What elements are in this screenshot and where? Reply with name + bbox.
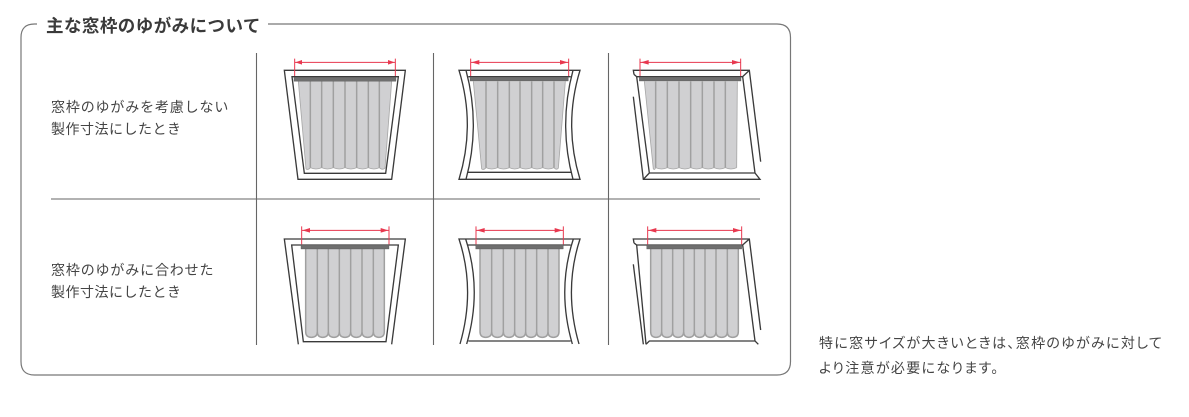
window: hourglass, size not considering distortion <box>459 59 580 179</box>
curtain <box>298 81 392 169</box>
head rail <box>647 245 742 249</box>
window frame <box>284 70 405 179</box>
row label: size matching distortion: 製作寸法にしたとき <box>51 284 182 300</box>
red width dimension arrow <box>648 226 742 244</box>
window: parallelogram, size matching distortion <box>633 226 761 344</box>
head rail <box>476 245 563 249</box>
side note <box>819 335 1163 376</box>
window frame <box>284 239 405 344</box>
head rail <box>470 77 568 81</box>
panel outline <box>21 24 790 375</box>
window frame <box>459 70 580 179</box>
curtain <box>473 81 565 169</box>
row label: size not considering distortion <box>51 99 229 137</box>
curtain <box>644 81 737 169</box>
window: parallelogram, size not considering distortion <box>633 59 761 179</box>
red width dimension arrow <box>471 59 569 76</box>
head rail <box>294 77 396 81</box>
side note: 特に窓サイズが大きいときは、窓枠のゆがみに対して <box>819 335 1163 351</box>
head rail <box>301 245 389 249</box>
red width dimension arrow <box>295 59 395 76</box>
head rail <box>639 77 741 81</box>
window frame <box>633 70 761 179</box>
row label: size matching distortion: 窓枠のゆがみに合わせた <box>51 262 214 278</box>
curtain <box>651 249 738 337</box>
window: trapezoid, size matching distortion <box>284 226 405 344</box>
red width dimension arrow <box>302 226 389 244</box>
curtain <box>480 249 559 337</box>
side note: より注意が必要になります。 <box>819 360 1000 376</box>
red width dimension arrow <box>476 226 563 244</box>
row label: size matching distortion <box>51 262 214 300</box>
red width dimension arrow <box>640 59 741 76</box>
curtain <box>306 249 384 337</box>
row label: size not considering distortion: 製作寸法にしたとき <box>51 121 182 137</box>
row label: size not considering distortion: 窓枠のゆがみを考慮しない <box>51 99 229 115</box>
window frame <box>459 239 580 344</box>
window: trapezoid, size not considering distortion <box>284 59 405 179</box>
title: 主な窓枠のゆがみについて <box>46 16 261 36</box>
table grid lines <box>51 53 760 345</box>
window frame <box>633 239 761 344</box>
window: hourglass, size matching distortion <box>459 226 580 344</box>
